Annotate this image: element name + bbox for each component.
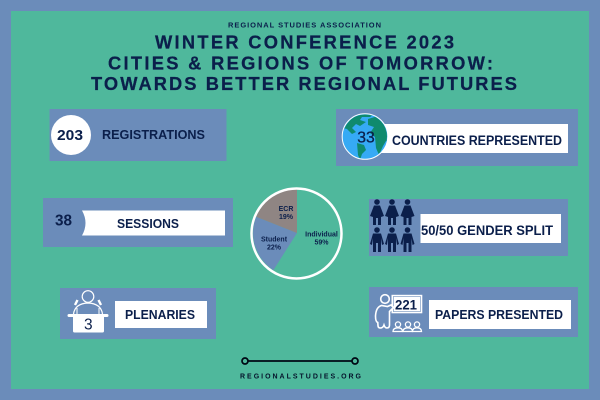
registrations number badge: 203 <box>57 127 83 144</box>
panel: papers <box>369 287 578 337</box>
title <box>91 31 517 94</box>
panel: sessions <box>43 198 233 247</box>
pie labels: 22% <box>267 244 282 252</box>
title: TOWARDS BETTER REGIONAL FUTURES <box>91 73 517 94</box>
icon: speaker at podium <box>68 291 108 332</box>
registrations label: REGISTRATIONS <box>102 127 205 142</box>
pie labels: Individual <box>305 232 338 238</box>
countries number: 33 <box>357 130 375 147</box>
slice: student <box>253 217 297 270</box>
registrations number badge <box>51 115 91 155</box>
papers number: 221 <box>395 296 417 312</box>
pie labels: 19% <box>279 214 294 221</box>
title: CITIES & REGIONS OF TOMORROW: <box>108 52 493 73</box>
organisation name: REGIONAL STUDIES ASSOCIATION <box>228 20 381 30</box>
icon: six people <box>370 199 414 252</box>
pie labels: Student <box>261 236 288 244</box>
papers label: PAPERS PRESENTED <box>435 307 563 322</box>
sessions ribbon <box>82 210 225 236</box>
countries label: COUNTRIES REPRESENTED <box>392 133 562 148</box>
plenaries label: PLENARIES <box>125 307 195 322</box>
icon: presenter and audience <box>376 295 422 332</box>
pie labels: ECR <box>279 206 293 213</box>
footer line with end dots <box>242 358 358 364</box>
pie labels <box>261 206 338 252</box>
plenaries number: 3 <box>84 316 93 333</box>
sessions number: 38 <box>55 213 72 230</box>
panel: countries <box>336 109 578 166</box>
pie labels: 59% <box>314 240 329 246</box>
title: WINTER CONFERENCE 2023 <box>155 31 454 52</box>
pie chart <box>252 188 342 278</box>
slice: ECR <box>256 189 297 233</box>
panel: registrations <box>50 109 226 161</box>
sessions label: SESSIONS <box>117 216 179 231</box>
icon: globe with number <box>342 113 390 160</box>
footer website: REGIONALSTUDIES.ORG <box>240 374 362 380</box>
gender split label: 50/50 GENDER SPLIT <box>421 223 554 238</box>
panel: gender split <box>369 199 568 256</box>
panel: plenaries <box>60 288 216 339</box>
slice: individual <box>252 188 342 278</box>
